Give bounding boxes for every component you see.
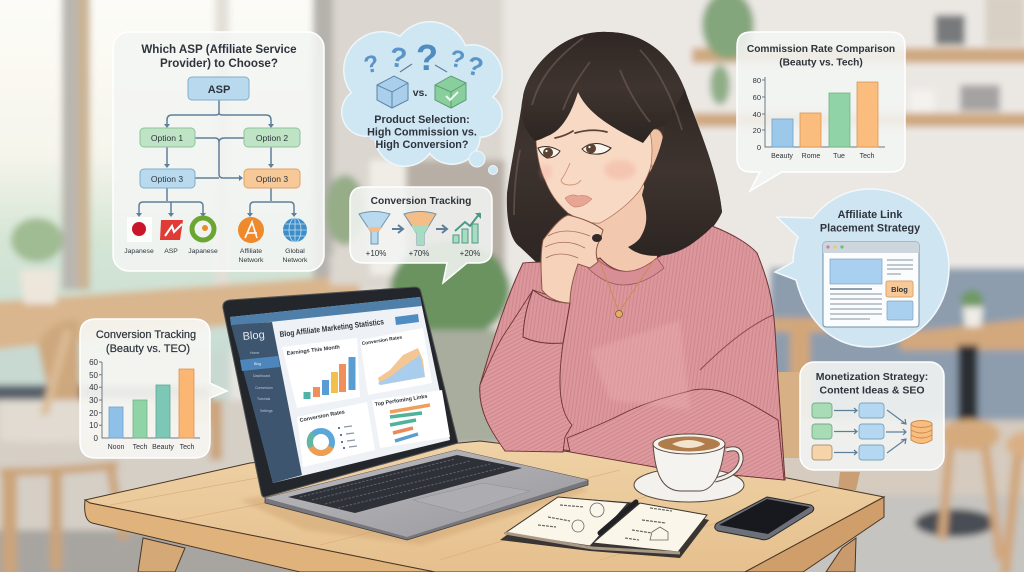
table top <box>85 441 884 572</box>
y axis labels: 60 <box>753 93 761 102</box>
heading: Conversion Tracking <box>96 329 196 341</box>
front hair cap with bangs <box>521 32 688 143</box>
funnel 1 <box>359 212 390 244</box>
conversion donut card <box>297 402 375 467</box>
hand on chin <box>541 215 603 303</box>
node: option 1: Option 1 <box>151 133 183 143</box>
icon: database <box>911 420 932 444</box>
finger lines and nail <box>545 231 602 258</box>
heading: (Beauty vs. TEO) <box>106 343 190 355</box>
screen background <box>230 297 450 483</box>
wall shelves <box>692 48 1024 63</box>
question text: High Commission vs. <box>367 126 477 138</box>
percent labels: +70% <box>409 249 429 258</box>
y axis labels: 30 <box>89 396 99 405</box>
heading: (Beauty vs. Tech) <box>779 58 863 68</box>
bars <box>772 82 878 147</box>
question marks: ? <box>388 41 409 74</box>
y axis labels: 10 <box>89 421 99 430</box>
x axis labels <box>108 444 194 451</box>
node: option 2 <box>244 128 300 147</box>
neck <box>590 180 660 285</box>
laptop <box>223 287 588 540</box>
collar <box>588 258 664 285</box>
back hair <box>507 32 722 268</box>
left eye <box>538 147 560 158</box>
bars <box>109 369 194 438</box>
sweater body <box>480 226 785 480</box>
table <box>85 441 884 572</box>
sidebar text <box>242 329 273 413</box>
heading: Affiliate Link <box>838 209 903 221</box>
y axis labels: 0 <box>757 143 761 152</box>
axes <box>99 362 200 438</box>
sidebar text: Dashboard <box>253 374 270 378</box>
node: option 2: Option 2 <box>256 133 288 143</box>
y axis labels: 20 <box>753 126 761 135</box>
x axis labels: Tue <box>833 153 845 160</box>
browser bar <box>230 297 422 326</box>
question text: Product Selection: <box>374 114 470 126</box>
question text: High Conversion? <box>376 139 468 151</box>
sleeve seam <box>700 315 773 370</box>
question marks: ? <box>464 50 487 83</box>
icon: red ASP mark <box>160 220 183 240</box>
active item <box>240 356 280 371</box>
earnings card: Earnings This Month <box>287 345 340 357</box>
browser window: Blog <box>891 285 908 294</box>
callout: conversion tracking bar chart <box>80 319 227 458</box>
icon labels: Japanese <box>124 248 154 255</box>
sidebar text: Home <box>250 351 259 355</box>
icon: affiliate network <box>238 217 264 243</box>
right lower hair over sweater <box>628 90 722 256</box>
conversion area card <box>360 328 432 395</box>
cloud fill <box>342 22 502 166</box>
nose <box>561 163 581 185</box>
browser window <box>823 242 919 327</box>
node: option 3 right <box>244 169 300 188</box>
sofa and right table <box>770 268 1024 420</box>
node: ASP <box>188 77 249 100</box>
earring <box>649 164 653 168</box>
question marks: ? <box>416 37 438 78</box>
icon: red circle flag <box>127 217 152 242</box>
right forearm sleeve <box>567 389 784 480</box>
callout: conversion tracking funnels <box>350 187 492 283</box>
coffee cup on saucer <box>634 434 744 502</box>
icon: green box <box>435 76 466 108</box>
percent labels: +10% <box>366 249 386 258</box>
icon: globe <box>283 218 307 242</box>
sweater highlights <box>590 320 690 410</box>
pendant <box>616 310 622 318</box>
y axis labels: 0 <box>94 434 99 443</box>
thought bubble: product selection <box>341 21 503 174</box>
arrow <box>436 225 447 233</box>
x axis labels: Tech <box>180 444 194 451</box>
blush <box>604 160 636 180</box>
icon: blue box <box>377 76 408 108</box>
vs: vs. <box>413 87 427 99</box>
conversion area card: Conversion Rates <box>361 335 403 347</box>
y axis labels: 50 <box>89 371 99 380</box>
y axis labels: 40 <box>753 110 761 119</box>
question marks <box>361 37 487 83</box>
tick marks <box>400 64 447 72</box>
cloud outline <box>341 21 503 167</box>
x axis labels: Noon <box>108 444 124 451</box>
open notebook with pen <box>500 497 709 558</box>
sidebar <box>231 322 302 483</box>
sidebar text: Conversion <box>255 386 273 390</box>
sidebar text: Blog <box>242 329 265 343</box>
arrowheads <box>136 124 297 217</box>
keyboard <box>288 455 522 513</box>
action button <box>395 314 419 325</box>
question marks: ? <box>361 50 381 79</box>
left sleeve <box>480 290 572 452</box>
node: option 1 <box>140 128 195 147</box>
x axis labels <box>771 153 874 160</box>
heading: Commission Rate Comparison <box>747 44 895 55</box>
heading: Provider) to Choose? <box>160 57 278 70</box>
icon: green target <box>192 218 214 240</box>
right eye <box>582 144 611 154</box>
ear <box>650 129 664 172</box>
node: option 3 left <box>140 169 195 188</box>
percent labels: +20% <box>460 249 480 258</box>
panel: monetization strategy <box>800 362 944 470</box>
x axis labels: Beauty <box>152 444 174 451</box>
heading: Conversion Tracking <box>371 196 471 207</box>
sidebar text: Blog <box>254 362 261 366</box>
node: option 3 left: Option 3 <box>151 174 183 184</box>
hair highlights <box>514 38 682 215</box>
earnings card <box>282 338 360 408</box>
smartphone <box>715 497 814 540</box>
sidebar text: Settings <box>260 409 273 413</box>
panel: which ASP <box>113 32 324 271</box>
icon labels: Network <box>283 257 308 264</box>
flow arrows <box>834 408 906 455</box>
front edge left <box>85 500 435 572</box>
heading: Content Ideas & SEO <box>819 384 925 396</box>
icon: growth chart <box>453 213 481 243</box>
top links card <box>372 390 450 448</box>
x axis labels: Tech <box>860 153 874 160</box>
flow boxes <box>812 403 884 460</box>
icon labels: Global <box>285 248 305 255</box>
x axis labels: Tech <box>133 444 147 451</box>
conversion donut card: Conversion Rates <box>299 409 345 424</box>
x axis labels: Beauty <box>771 153 793 160</box>
icon labels: ASP <box>164 248 178 255</box>
percent labels <box>366 249 480 258</box>
heading: Which ASP (Affiliate Service <box>141 43 297 56</box>
heading: Placement Strategy <box>820 222 920 234</box>
sidebar text: Tutorials <box>257 397 271 401</box>
y axis labels: 40 <box>89 383 99 392</box>
left blush <box>540 164 552 180</box>
lips <box>565 195 592 207</box>
woman with worried expression <box>480 32 785 480</box>
callout: affiliate link placement <box>775 189 949 347</box>
front edge right <box>745 497 884 572</box>
wooden chair behind woman <box>777 372 802 458</box>
left table, chair and plant <box>0 275 360 350</box>
y axis labels <box>753 76 761 152</box>
cuff left <box>523 290 570 343</box>
heading: Monetization Strategy: <box>816 371 928 383</box>
y axis labels: 80 <box>753 76 761 85</box>
thought dots <box>469 151 485 167</box>
axes <box>762 77 885 147</box>
top links card: Top Perfoming Links <box>374 394 428 408</box>
table leg right <box>826 538 856 572</box>
icon labels <box>124 248 308 264</box>
necklace <box>600 260 654 312</box>
dashboard title: Blog Affiliate Marketing Statistics <box>279 317 385 339</box>
node: option 3 right: Option 3 <box>256 174 288 184</box>
icon labels: Japanese <box>188 248 218 255</box>
screen bezel <box>223 287 458 497</box>
icon labels: Network <box>239 257 264 264</box>
face <box>536 88 652 223</box>
x axis labels: Rome <box>802 153 820 160</box>
node: ASP: ASP <box>208 84 230 96</box>
laptop base <box>265 450 588 540</box>
flow connectors <box>139 100 294 215</box>
callout: commission rate comparison <box>737 32 905 191</box>
large plant <box>390 240 510 340</box>
y axis labels <box>89 358 99 443</box>
eyebrows <box>555 130 607 138</box>
table leg left <box>138 538 185 572</box>
arrow <box>392 225 403 233</box>
funnel 2 <box>404 212 436 245</box>
question marks: ? <box>448 45 467 74</box>
trackpad <box>413 483 530 513</box>
y axis labels: 60 <box>89 358 99 367</box>
icon labels: Affiliate <box>240 248 262 255</box>
y axis labels: 20 <box>89 409 99 418</box>
